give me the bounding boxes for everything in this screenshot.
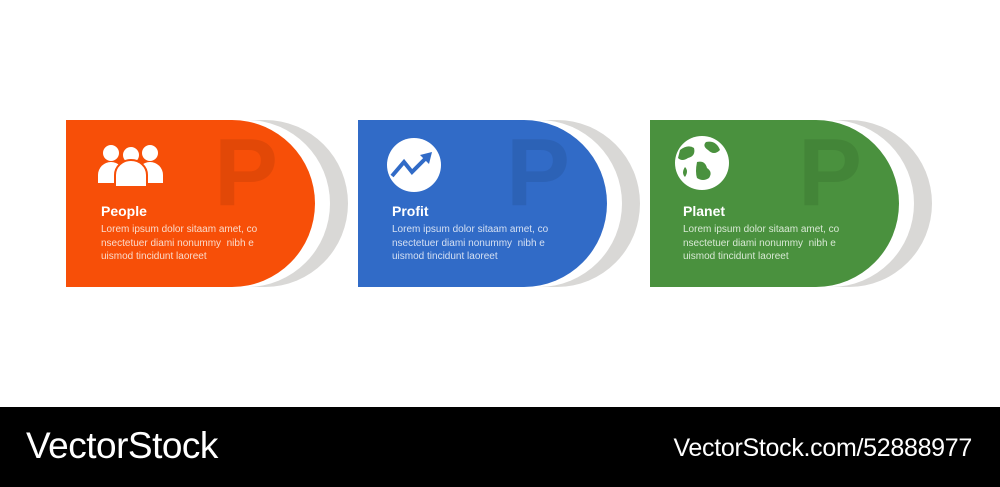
text: people: People xyxy=(101,203,147,219)
text: people: uismod tincidunt laoreet xyxy=(101,251,207,262)
text: profit: uismod tincidunt laoreet xyxy=(392,251,498,262)
text: profit: nsectetuer diami nonummy nibh e xyxy=(392,238,545,248)
text: profit: Profit xyxy=(392,203,429,219)
text: profit xyxy=(392,203,548,262)
card: people: P xyxy=(214,119,278,226)
footer id: VectorStock.com/52888977 xyxy=(673,434,972,462)
card: profit xyxy=(358,119,640,287)
text: people xyxy=(101,203,257,262)
text: planet: nsectetuer diami nonummy nibh e xyxy=(683,238,836,248)
icon: globe xyxy=(675,136,729,190)
text: profit: Lorem ipsum dolor sitaam amet, co xyxy=(392,224,548,235)
text: planet: Planet xyxy=(683,203,725,219)
card: planet: P xyxy=(798,119,862,226)
text: people: Lorem ipsum dolor sitaam amet, co xyxy=(101,224,257,235)
text: planet xyxy=(683,203,839,262)
text: people: nsectetuer diami nonummy nibh e xyxy=(101,238,254,248)
icon: people xyxy=(98,145,163,187)
card: planet xyxy=(650,119,932,287)
footer logo: VectorStock xyxy=(26,425,218,466)
text: planet: Lorem ipsum dolor sitaam amet, co xyxy=(683,224,839,235)
card: people xyxy=(66,119,348,287)
icon: growth xyxy=(387,138,441,192)
footer bar xyxy=(0,407,1000,487)
card: profit: P xyxy=(506,119,570,226)
text: planet: uismod tincidunt laoreet xyxy=(683,251,789,262)
